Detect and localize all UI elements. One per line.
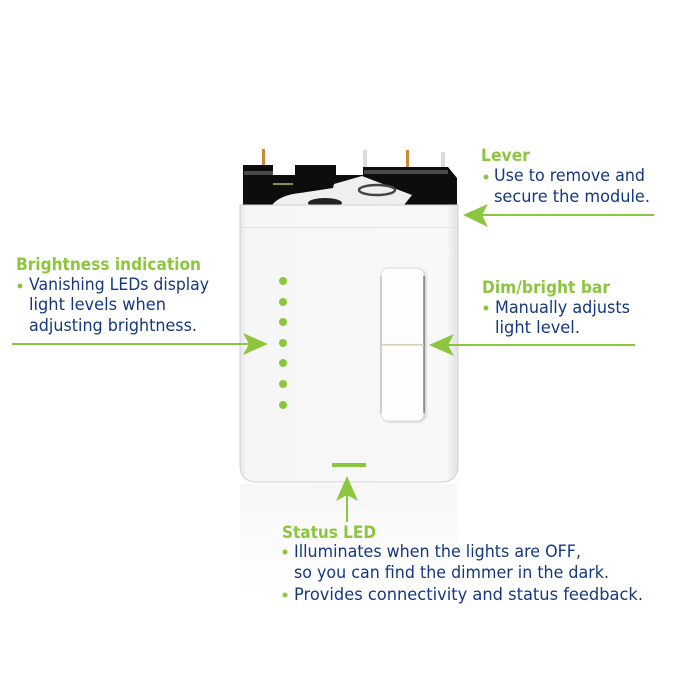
callout: dim/bright bar: Dim/bright bar (482, 278, 611, 298)
callout: dim/bright bar: Manually adjusts (495, 298, 630, 318)
callout: brightness indication: Brightness indication (16, 255, 201, 275)
callout: status LED (282, 523, 643, 605)
arrow: brightness indication (12, 333, 268, 355)
device reflection (240, 484, 457, 600)
callout: lever: Use to remove and (494, 166, 645, 186)
dim/bright bar (381, 268, 426, 422)
callout: status LED: Illuminates when the lights are OFF, (294, 542, 581, 562)
dimmer module (240, 149, 458, 482)
callout: status LED: Provides connectivity and status feedback. (294, 585, 643, 605)
arrow: dim/bright bar (429, 334, 635, 356)
callout: dim/bright bar: light level. (495, 318, 580, 338)
callout: brightness indication: adjusting brightness. (29, 316, 197, 336)
callout: brightness indication: Vanishing LEDs display (29, 275, 209, 295)
callout: lever: secure the module. (494, 187, 650, 207)
callout: lever: Lever (481, 146, 531, 166)
status LED bar (332, 463, 366, 467)
module front face (240, 205, 458, 482)
callout: brightness indication (16, 255, 209, 336)
callout: lever (481, 146, 650, 207)
callout: dim/bright bar (482, 278, 630, 338)
module top: black housing and lever (243, 149, 457, 208)
arrow: status LED (336, 476, 358, 522)
brightness LEDs (279, 277, 287, 409)
callout: status LED: so you can find the dimmer in the dark. (294, 563, 609, 583)
callout: status LED: Status LED (282, 523, 376, 543)
top edge line (241, 227, 457, 228)
arrow: lever (463, 204, 654, 227)
callout: brightness indication: light levels when (29, 295, 166, 315)
